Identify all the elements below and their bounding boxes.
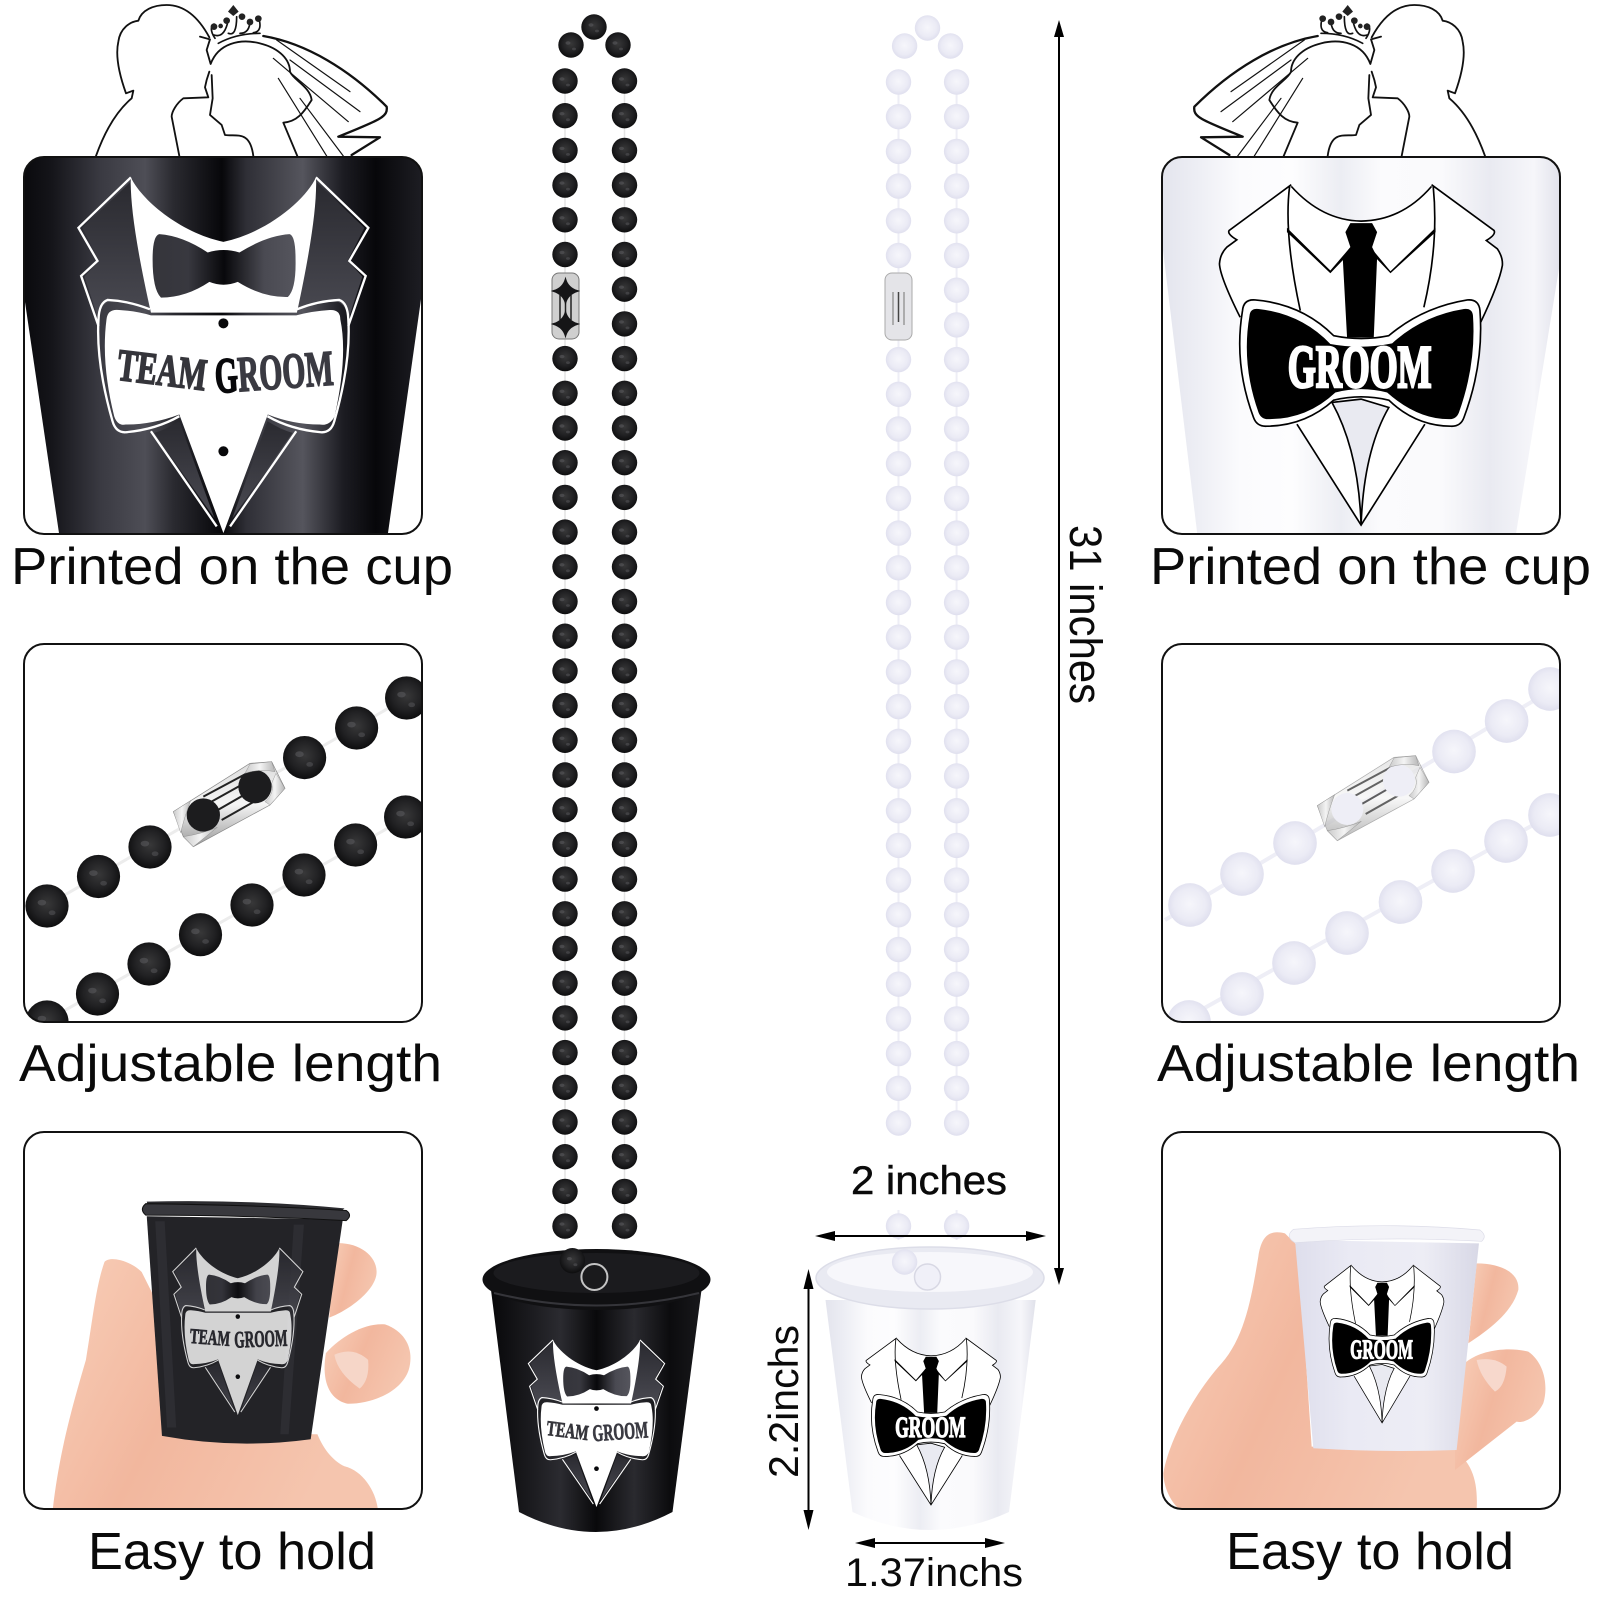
tuxedo print: team groom: GROOM bbox=[213, 340, 335, 404]
label: 1.37 inchs: 1.37inchs bbox=[845, 1551, 1023, 1595]
panel: black cup print bbox=[20, 157, 424, 540]
caption: adjustable length right: Adjustable length bbox=[1157, 1035, 1580, 1093]
couple silhouette: left bbox=[96, 5, 387, 156]
label: 2.2 inchs: 2.2inchs bbox=[760, 1325, 807, 1478]
black bead necklace bbox=[552, 14, 637, 1240]
white shot glass bbox=[816, 1247, 1044, 1530]
panel: white cup in hand bbox=[1162, 1132, 1560, 1510]
arrow: 31 inches length bbox=[1054, 20, 1064, 1285]
label: 2 inches: 2 inches bbox=[851, 1159, 1007, 1203]
icon: necklace clasp white bbox=[885, 273, 912, 340]
cup bbox=[147, 1216, 343, 1444]
hand bbox=[1163, 1232, 1545, 1510]
arrow: 2 inches width bbox=[815, 1231, 1046, 1241]
tuxedo print: groom: GROOM bbox=[1288, 334, 1432, 401]
arrow: 1.37 inches base bbox=[855, 1538, 1005, 1548]
arrow: 2.2 inches height bbox=[804, 1269, 814, 1530]
tuxedo print: team groom: GROOM bbox=[234, 1324, 288, 1353]
white bead necklace bbox=[885, 15, 969, 1240]
tuxedo print: groom bbox=[861, 1338, 1000, 1505]
tuxedo print: team groom: TEAM bbox=[115, 340, 210, 400]
panel: black beads adjustable clasp bbox=[24, 644, 428, 1044]
caption: printed on the cup right: Printed on the cup bbox=[1150, 538, 1591, 596]
panel: white cup print bbox=[1160, 157, 1562, 540]
panel: black cup in hand bbox=[24, 1132, 422, 1515]
hand bbox=[52, 1243, 410, 1515]
caption: adjustable length left: Adjustable length bbox=[19, 1035, 442, 1093]
tuxedo print: groom: GROOM bbox=[1350, 1334, 1413, 1365]
icon: clasp bbox=[1317, 756, 1429, 841]
tuxedo print: team groom bbox=[78, 177, 368, 533]
cup bbox=[1295, 1240, 1479, 1451]
caption: printed on the cup left: Printed on the cup bbox=[11, 538, 453, 596]
tuxedo print: groom bbox=[1219, 185, 1502, 525]
tuxedo print: team groom: TEAM bbox=[545, 1416, 590, 1445]
tuxedo print: team groom: GROOM bbox=[592, 1417, 649, 1447]
tuxedo print: groom bbox=[1320, 1265, 1444, 1423]
tuxedo print: team groom bbox=[528, 1340, 665, 1507]
tuxedo print: groom: GROOM bbox=[895, 1412, 966, 1444]
caption: easy to hold right: Easy to hold bbox=[1226, 1523, 1514, 1581]
tuxedo print: team groom: TEAM bbox=[189, 1326, 231, 1351]
label: 31 inches: 31 inches bbox=[1060, 525, 1111, 704]
icon: necklace clasp black bbox=[552, 273, 579, 339]
black shot glass bbox=[482, 1248, 710, 1532]
caption: easy to hold left: Easy to hold bbox=[88, 1523, 376, 1581]
icon: clasp bbox=[173, 762, 285, 847]
couple silhouette: right bbox=[1194, 5, 1485, 156]
tuxedo print: team groom bbox=[173, 1248, 303, 1415]
panel: white beads adjustable clasp bbox=[1162, 644, 1572, 1044]
